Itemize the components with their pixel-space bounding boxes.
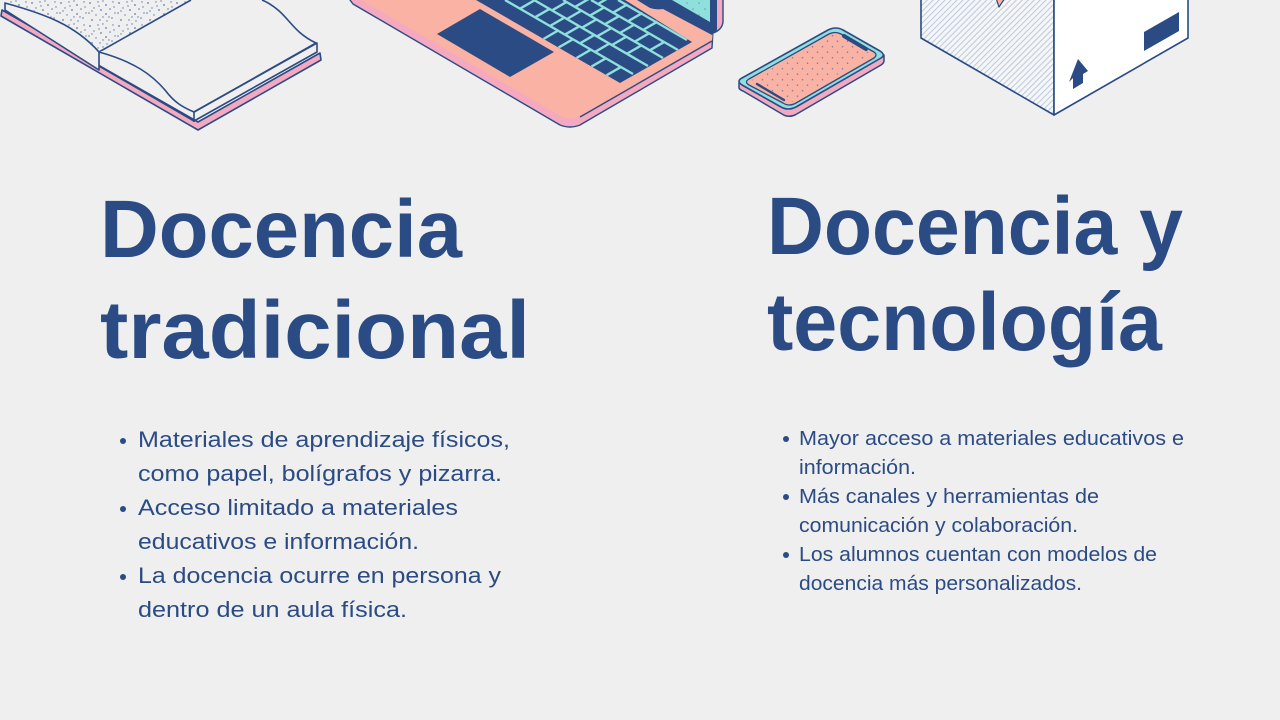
box up arrow: [1069, 59, 1088, 89]
heading: Docencia tradicional: Docencia: [100, 184, 463, 275]
book stippled left page: [5, 0, 191, 52]
bullet list: traditional teaching: Materiales de aprendizaje físicos,: [138, 427, 510, 452]
bullet list: traditional teaching: La docencia ocurre en persona y: [138, 563, 501, 588]
heading: Docencia tradicional: [100, 184, 530, 376]
bullet list: teaching and technology: información.: [799, 457, 916, 479]
bullet list: teaching and technology: Mayor acceso a materiales educativos e: [799, 428, 1184, 450]
book left page edge: [5, 3, 99, 70]
keyboard: [476, 0, 692, 83]
book spine line: [99, 0, 191, 52]
box right face: [1054, 0, 1188, 115]
heading: Docencia tradicional: tradicional: [100, 285, 530, 376]
bullet list: traditional teaching: educativos e información.: [138, 529, 419, 554]
heading: Docencia y tecnología: tecnología: [767, 277, 1163, 368]
icon: open book: [1, 0, 321, 130]
phone home bar: [757, 84, 784, 100]
heading: Docencia y tecnología: Docencia y: [767, 181, 1183, 272]
laptop lid: [700, 0, 723, 33]
icon: cardboard box: [921, 0, 1188, 115]
book cover: [1, 10, 321, 130]
bullet list: teaching and technology: docencia más personalizados.: [799, 573, 1082, 595]
book right page: [99, 0, 316, 112]
bullet list: teaching and technology: comunicación y colaboración.: [799, 515, 1078, 537]
bullet list: teaching and technology: [783, 428, 1184, 595]
trackpad: [437, 9, 554, 77]
phone screen dots: [752, 34, 871, 102]
phone screen: [746, 32, 876, 105]
icon: laptop: [350, 0, 723, 127]
phone notch: [844, 36, 866, 49]
icon: smartphone: [739, 28, 884, 116]
bullet list: traditional teaching: dentro de un aula física.: [138, 597, 407, 622]
phone body: [739, 55, 884, 116]
heading: Docencia y tecnología: [767, 181, 1183, 368]
bullet list: teaching and technology: Más canales y herramientas de: [799, 486, 1099, 508]
bullet list: traditional teaching: Acceso limitado a materiales: [138, 495, 458, 520]
box label: [1144, 12, 1179, 51]
book right page edge: [99, 43, 317, 122]
laptop screen frame: [637, 0, 717, 35]
bullet list: traditional teaching: [120, 427, 510, 622]
laptop base: [350, 0, 713, 127]
box left face: [921, 0, 1054, 115]
bullet list: traditional teaching: como papel, bolígrafos y pizarra.: [138, 461, 502, 486]
laptop deck: [361, 0, 713, 118]
bullet list: teaching and technology: Los alumnos cuentan con modelos de: [799, 544, 1157, 566]
phone frame: [739, 28, 883, 109]
laptop screen: [672, 0, 710, 22]
box tape tip: [996, 0, 1005, 7]
